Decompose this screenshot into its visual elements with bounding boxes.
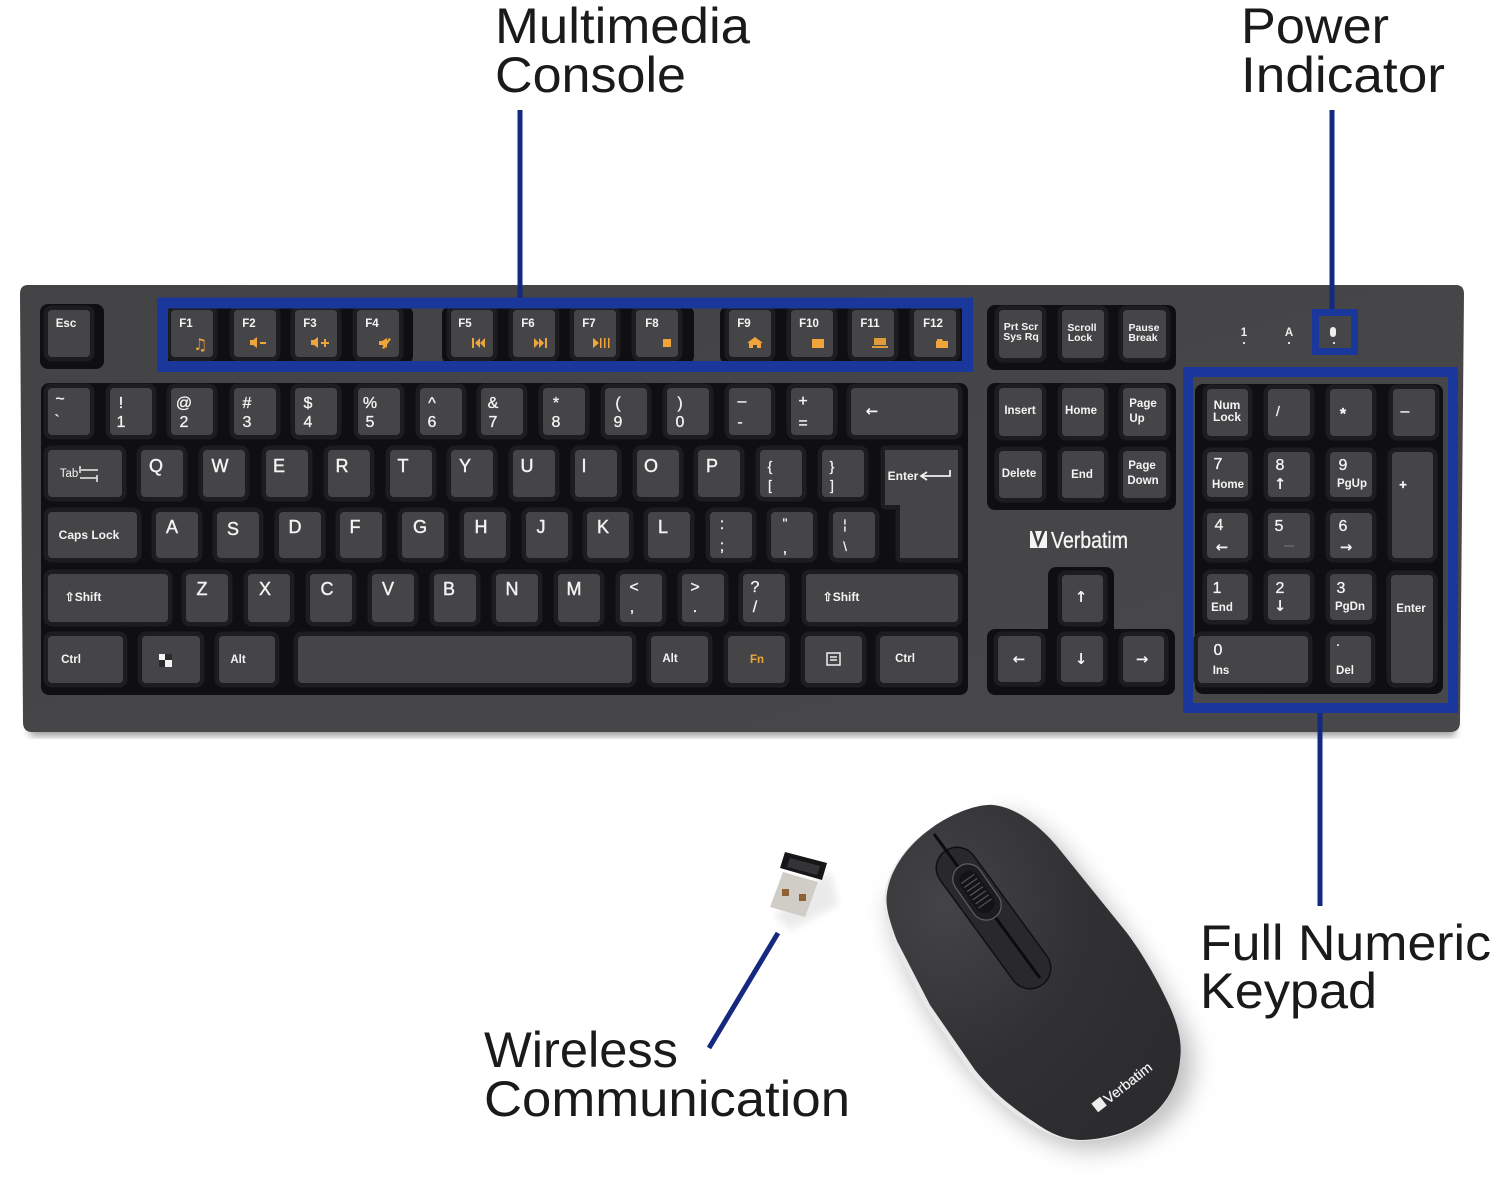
icon: windows key xyxy=(159,654,172,667)
shift row: Z xyxy=(196,579,208,599)
home row: , xyxy=(783,540,787,557)
heading: Full Numeric Keypad: Full Numeric xyxy=(1200,915,1491,971)
numeric keypad keys: ↑ xyxy=(1274,475,1286,493)
number row: 2 xyxy=(180,414,189,431)
number row: 9 xyxy=(614,414,623,431)
numeric keypad keys: 8 xyxy=(1276,457,1285,474)
home row: Caps Lock xyxy=(59,528,120,542)
number row: 7 xyxy=(489,414,498,431)
shift row: < xyxy=(629,579,639,596)
numeric keypad keys: 9 xyxy=(1339,457,1348,474)
shift row: X xyxy=(259,579,271,599)
QWERTY row: ] xyxy=(830,477,834,493)
shift row: ⇧Shift xyxy=(65,590,101,604)
numeric keypad keys xyxy=(1195,384,1443,694)
navigation keys: Page xyxy=(1128,460,1156,472)
numeric keypad keys: 7 xyxy=(1214,456,1223,473)
bottom row: Ctrl xyxy=(895,653,915,665)
heading: Multimedia Console xyxy=(495,0,750,103)
navigation keys: Delete xyxy=(1002,468,1036,480)
function keys group: F4 xyxy=(365,318,379,330)
numeric keypad keys: ← xyxy=(1216,538,1228,556)
bottom row xyxy=(48,636,958,683)
leader line: numeric keypad xyxy=(1318,713,1322,906)
callout box: multimedia console xyxy=(162,303,968,366)
numeric keypad keys: 4 xyxy=(1215,517,1224,534)
numeric keypad keys: → xyxy=(1340,538,1352,556)
arrow keys xyxy=(987,567,1175,695)
function keys group: F5 xyxy=(458,318,472,330)
function keys group: F12 xyxy=(923,318,943,330)
home row: A xyxy=(166,517,178,537)
QWERTY row: O xyxy=(644,456,658,476)
number row: 0 xyxy=(676,414,685,431)
shift row: V xyxy=(382,579,394,599)
navigation keys: Down xyxy=(1127,475,1159,487)
function keys group: F9 xyxy=(737,318,751,330)
system keys: print screen, scroll lock, pause: Prt Scr xyxy=(1004,321,1038,333)
numeric keypad keys: + xyxy=(1399,477,1407,492)
keyboard shadow xyxy=(30,722,1455,736)
function keys group: F7 xyxy=(582,318,596,330)
home row: G xyxy=(413,517,427,537)
arrow keys: → xyxy=(1136,650,1148,668)
QWERTY row: { xyxy=(768,458,773,474)
shift row: B xyxy=(443,579,455,599)
numeric keypad keys: / xyxy=(1276,403,1280,419)
number row: @ xyxy=(176,395,192,412)
number row xyxy=(48,388,958,435)
bottom row: Ctrl xyxy=(61,654,81,666)
function keys group: F1 xyxy=(179,318,193,330)
navigation keys: Insert xyxy=(1004,405,1036,417)
shift row: ? xyxy=(751,579,760,596)
number row: ^ xyxy=(428,395,436,412)
numeric keypad keys: 2 xyxy=(1276,580,1285,597)
status indicator lights: 1 xyxy=(1241,327,1248,339)
number row: ! xyxy=(119,395,123,412)
numeric keypad keys: Num xyxy=(1214,398,1240,412)
QWERTY row: Tab xyxy=(60,468,78,480)
main key block xyxy=(41,383,968,695)
home row: D xyxy=(288,517,302,537)
key: Esc xyxy=(40,304,104,369)
leader line: power indicator xyxy=(1330,110,1334,309)
home row: L xyxy=(658,517,668,537)
numeric keypad keys: End xyxy=(1211,602,1233,614)
icons: multimedia functions: ♫ xyxy=(193,335,207,354)
number row: ) xyxy=(677,395,683,412)
numeric keypad keys: 6 xyxy=(1339,518,1348,535)
system keys: print screen, scroll lock, pause: Sys Rq xyxy=(1003,331,1039,343)
function keys group: F2 xyxy=(242,318,256,330)
heading: Full Numeric Keypad: Keypad xyxy=(1200,963,1377,1019)
function keys group: F8 xyxy=(645,318,659,330)
number row: $ xyxy=(304,395,313,412)
numeric keypad keys: Lock xyxy=(1213,410,1241,424)
shift row: . xyxy=(693,599,697,616)
mouse white rim xyxy=(884,805,1181,1141)
home row: \ xyxy=(843,539,847,554)
function keys group xyxy=(165,306,965,364)
brand logo: Verbatim xyxy=(1030,527,1128,553)
numeric keypad keys: PgDn xyxy=(1335,601,1365,613)
number row: 1 xyxy=(117,414,126,431)
number row: ~ xyxy=(55,391,65,408)
shift row: C xyxy=(320,579,334,599)
home row: H xyxy=(474,517,488,537)
shift row: ⇧Shift xyxy=(823,590,859,604)
numeric keypad keys: – xyxy=(1401,403,1410,420)
QWERTY row: I xyxy=(581,456,587,476)
system keys: print screen, scroll lock, pause: Pause xyxy=(1129,322,1160,334)
bottom row: Alt xyxy=(662,653,678,665)
QWERTY row: W xyxy=(212,456,228,476)
heading: Multimedia Console: Console xyxy=(495,47,686,103)
shift row: > xyxy=(690,579,700,596)
numeric keypad keys: ↓ xyxy=(1274,597,1286,615)
function keys group: F6 xyxy=(521,318,535,330)
QWERTY row: [ xyxy=(768,477,772,493)
heading: Power Indicator xyxy=(1241,0,1445,103)
numeric keypad keys: 0 xyxy=(1214,642,1223,659)
callout box: numeric keypad xyxy=(1188,372,1453,708)
heading: Wireless Communication xyxy=(484,1022,850,1127)
number row: ← xyxy=(866,402,878,420)
home row: F xyxy=(350,517,360,537)
QWERTY row: Q xyxy=(149,456,163,476)
number row: ` xyxy=(54,413,60,430)
number row: - xyxy=(737,414,743,431)
number row: & xyxy=(488,395,499,412)
numeric keypad keys: PgUp xyxy=(1337,478,1367,490)
numeric keypad keys: 5 xyxy=(1275,518,1284,535)
numeric keypad keys: Del xyxy=(1336,665,1354,677)
number row: 8 xyxy=(552,414,561,431)
bottom row: Fn xyxy=(750,654,764,666)
navigation keys: Home xyxy=(1065,405,1097,417)
QWERTY row: P xyxy=(706,456,718,476)
home row: " xyxy=(783,515,788,531)
function keys group: F11 xyxy=(860,318,880,330)
bottom row: Alt xyxy=(230,654,246,666)
key: Esc: Esc xyxy=(56,318,77,330)
status indicator lights xyxy=(1241,327,1336,344)
arrow keys: ↓ xyxy=(1075,650,1087,668)
leader line: wireless communication xyxy=(709,933,778,1048)
system keys: print screen, scroll lock, pause: Lock xyxy=(1068,332,1092,344)
arrow keys: ↑ xyxy=(1075,588,1087,606)
number row: 5 xyxy=(366,414,375,431)
numeric keypad keys: . xyxy=(1336,637,1340,649)
numeric keypad keys: * xyxy=(1340,406,1347,423)
home row: S xyxy=(227,519,239,539)
QWERTY row: E xyxy=(273,456,285,476)
number row: – xyxy=(738,393,747,410)
QWERTY row: U xyxy=(520,456,534,476)
system keys: print screen, scroll lock, pause xyxy=(987,305,1176,370)
shift row: , xyxy=(630,599,634,616)
leader line: multimedia console xyxy=(518,110,522,298)
icon: menu key xyxy=(827,653,840,665)
number row: 4 xyxy=(304,414,313,431)
icons: multimedia functions xyxy=(193,335,948,354)
arrow keys: ← xyxy=(1013,650,1025,668)
mouse shadow xyxy=(890,815,1193,1150)
navigation keys: End xyxy=(1071,469,1093,481)
navigation keys: Up xyxy=(1129,413,1145,425)
keyboard body xyxy=(20,285,1464,732)
QWERTY row xyxy=(48,450,958,558)
number row: 6 xyxy=(428,414,437,431)
numeric keypad keys: Ins xyxy=(1213,665,1229,677)
heading: Wireless Communication: Communication xyxy=(484,1071,850,1127)
number row: + xyxy=(798,393,808,410)
home row xyxy=(48,512,875,558)
QWERTY row: R xyxy=(336,456,348,476)
mouse brand logo xyxy=(1090,1059,1155,1115)
system keys: print screen, scroll lock, pause: Break xyxy=(1128,332,1158,344)
heading: Wireless Communication: Wireless xyxy=(484,1022,678,1078)
system keys: print screen, scroll lock, pause: Scroll xyxy=(1067,322,1097,334)
callout box: power indicator xyxy=(1316,312,1354,352)
function keys group: F10 xyxy=(799,318,819,330)
home row: ¦ xyxy=(843,517,847,532)
home row: J xyxy=(536,517,546,537)
heading: Full Numeric Keypad xyxy=(1200,915,1491,1019)
navigation keys xyxy=(987,383,1176,510)
navigation keys: Page xyxy=(1129,398,1157,410)
shift row: / xyxy=(753,599,758,616)
number row: ( xyxy=(615,395,621,412)
number row: % xyxy=(363,395,377,412)
home row: : xyxy=(720,516,724,533)
home row: ; xyxy=(720,538,724,555)
numeric keypad keys: Home xyxy=(1212,479,1244,491)
mouse body xyxy=(886,805,1181,1140)
numeric keypad keys: Enter xyxy=(1396,603,1426,615)
numeric keypad keys: 3 xyxy=(1337,580,1346,597)
function keys group: F3 xyxy=(303,318,317,330)
status indicator lights: A xyxy=(1285,327,1293,339)
numeric keypad keys: 1 xyxy=(1213,580,1222,597)
brand logo: Verbatim: Verbatim xyxy=(1051,527,1128,553)
shift row: N xyxy=(506,579,518,599)
scroll slot xyxy=(957,868,1030,968)
mouse brand logo: Verbatim xyxy=(1100,1059,1155,1107)
home row: K xyxy=(597,517,609,537)
number row: 3 xyxy=(243,414,252,431)
number row: = xyxy=(798,415,808,432)
QWERTY row: Y xyxy=(459,456,471,476)
QWERTY row: T xyxy=(398,456,408,476)
illustration: USB wireless dongle xyxy=(770,852,838,930)
scroll wheel xyxy=(947,858,1007,926)
shift row xyxy=(48,574,958,622)
number row: # xyxy=(243,395,252,412)
shift row: M xyxy=(566,579,582,599)
QWERTY row: } xyxy=(830,458,835,474)
illustration: wireless mouse xyxy=(884,805,1193,1150)
QWERTY row: Enter xyxy=(888,469,919,483)
heading: Power Indicator: Indicator xyxy=(1241,47,1445,103)
number row: * xyxy=(553,395,559,412)
